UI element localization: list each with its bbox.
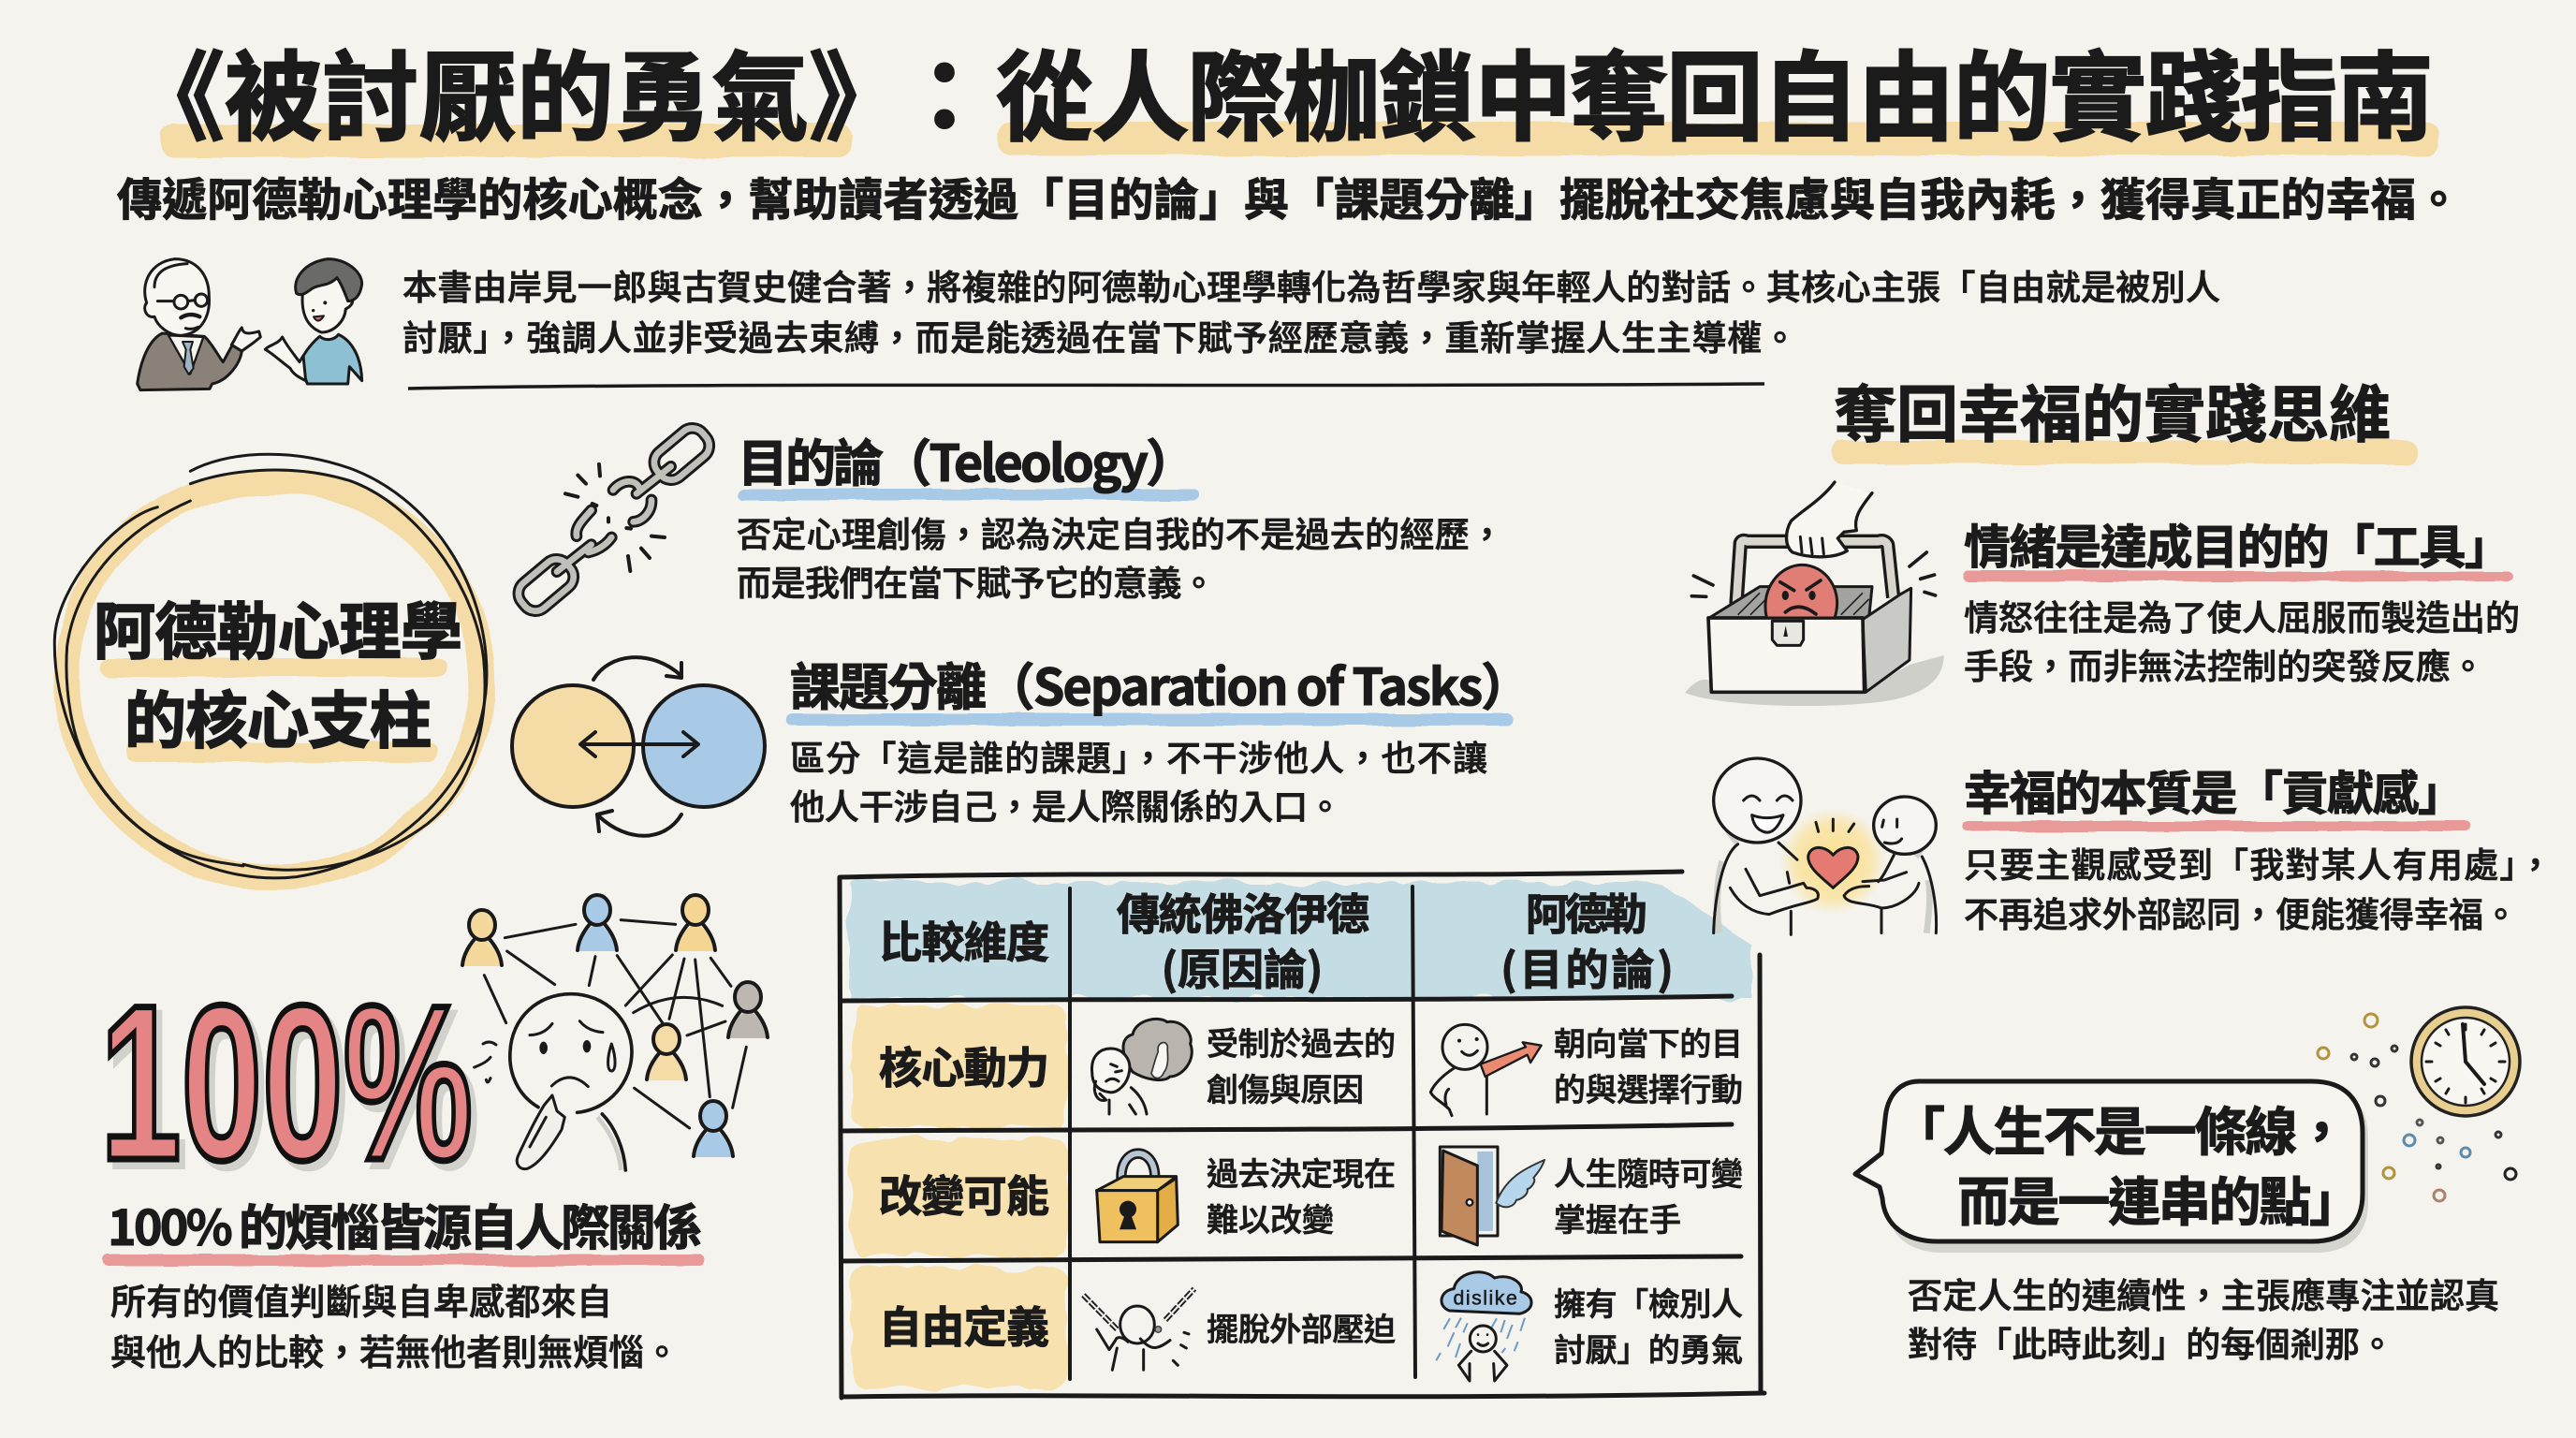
alert ticks [1691, 552, 1936, 596]
yellow ring [66, 480, 482, 877]
contribution heading: 幸福的本質是「貢獻感」 [1964, 756, 2465, 824]
stat: 100 percent [100, 960, 478, 1213]
dislike label: dislike [1453, 1286, 1517, 1309]
clock [2411, 1007, 2520, 1116]
handle [1736, 540, 1894, 604]
top arrow [593, 657, 681, 680]
cell line 2: 的與選擇行動 [1554, 1064, 1743, 1110]
teleology description line 1: 否定心理創傷，認為決定自我的不是過去的經歷， [737, 506, 1504, 557]
network person blue [578, 895, 617, 951]
network person yellow [647, 1024, 686, 1080]
network person yellow [676, 895, 715, 951]
title colon: ： [896, 19, 993, 160]
icon: padlock [1097, 1153, 1178, 1242]
network person yellow [462, 910, 502, 966]
quote explanation [1908, 1268, 2499, 1367]
floor shadow [1685, 655, 1944, 706]
callout: speech bubble quote [1855, 1081, 2368, 1253]
icon: person breaking chains [1083, 1289, 1194, 1370]
latch [1772, 621, 1804, 645]
row label wash: core motivation [852, 1005, 1067, 1127]
title highlight left [161, 124, 852, 157]
network person blue [694, 1101, 733, 1157]
separation description line 2: 他人干涉自己，是人際關係的入口。 [790, 779, 1342, 829]
contribution underline [1963, 821, 2471, 831]
explanation line 2: 對待「此時此刻」的每個剎那。 [1908, 1316, 2394, 1367]
title text left: 《被討厭的勇氣》 [127, 19, 906, 160]
cell line 1: 受制於過去的 [1207, 1019, 1396, 1064]
icon: person with trauma cloud [1091, 1019, 1192, 1114]
small person [1916, 812, 1929, 933]
teleology heading: 目的論（Teleology） [738, 422, 1196, 496]
row label: possibility of change: 改變可能 [879, 1163, 1049, 1225]
icon: door with wing [1440, 1147, 1544, 1245]
header: Adler: 阿德勒 [1526, 881, 1647, 943]
bottom arrow [597, 811, 681, 836]
big person [1717, 786, 1738, 933]
cell line 1: 朝向當下的目 [1554, 1019, 1743, 1064]
scattered dots [2318, 1014, 2516, 1201]
block: interpersonal worries [103, 1189, 705, 1375]
heading text: 奪回幸福的實踐思維 [1835, 365, 2391, 455]
icon: person pointing forward [1430, 1024, 1542, 1116]
icon: two people and heart [1714, 758, 1937, 934]
title highlight right [998, 122, 2439, 155]
heading: practice mindset [1832, 365, 2417, 464]
contribution line 2: 不再追求外部認同，便能獲得幸福。 [1964, 887, 2518, 937]
cell line 1: 擁有「檢別人 [1554, 1279, 1743, 1325]
heading highlight [1832, 440, 2417, 464]
teleology underline [737, 489, 1199, 500]
emotion heading: 情緒是達成目的的「工具」 [1964, 510, 2511, 578]
explanation line 1: 否定人生的連續性，主張應專注並認真 [1908, 1268, 2499, 1318]
clock and dots [2318, 1007, 2520, 1201]
blue circle [643, 685, 765, 807]
stat number: 100% [100, 960, 473, 1207]
subtitle: 傳遞阿德勒心理學的核心概念，幫助讀者透過「目的論」與「課題分離」擺脫社交焦慮與自我內耗，獲得真正的幸福。 [117, 163, 2461, 228]
intro line 2: 討厭」，強調人並非受過去束縛，而是能透過在當下賦予經歷意義，重新掌握人生主導權。 [402, 310, 1797, 360]
angry face [1765, 565, 1837, 618]
concept: separation of tasks [786, 646, 1531, 829]
separation heading: 課題分離（Separation of Tasks） [790, 646, 1531, 720]
row label wash: definition of freedom [852, 1268, 1067, 1387]
box front [1708, 618, 1865, 692]
row label wash: possibility of change [852, 1138, 1067, 1256]
text: life can change [1554, 1149, 1743, 1240]
text: past trauma [1207, 1019, 1396, 1110]
worries line 1: 所有的價值判斷與自卑感都來自 [110, 1273, 612, 1325]
network lines [484, 920, 746, 1128]
icon: philosopher and youth [138, 259, 362, 390]
old philosopher [138, 259, 260, 390]
heart [1808, 847, 1858, 888]
insight: emotion as tool [1963, 510, 2520, 689]
text: courage to be disliked [1554, 1279, 1743, 1371]
cell line 2: 掌握在手 [1554, 1195, 1681, 1240]
worried head and body [475, 994, 632, 1170]
yellow circle [512, 685, 634, 807]
insight: contribution [1963, 756, 2553, 937]
pillar line 1 highlight [100, 658, 447, 677]
glow [1780, 808, 1886, 915]
title [127, 19, 2439, 160]
double arrow [580, 732, 698, 756]
stat shadow: 100% [106, 966, 478, 1213]
worries heading: 100% 的煩惱皆源自人際關係 [108, 1189, 702, 1259]
ink ring [54, 454, 487, 878]
panel: core pillars circle [54, 454, 487, 878]
separation description line 1: 區分「這是誰的課題」，不干涉他人，也不讓 [790, 730, 1487, 781]
bubble [1855, 1081, 2363, 1241]
header wash [850, 882, 1752, 998]
header: Freud subtitle: (原因論) [1162, 936, 1323, 998]
bubble shadow [1865, 1086, 2368, 1253]
row label: core motivation: 核心動力 [879, 1034, 1049, 1096]
title text right: 從人際枷鎖中奪回自由的實踐指南 [996, 19, 2434, 160]
worries line 2: 與他人的比較，若無他者則無煩惱。 [110, 1324, 680, 1375]
table grid [840, 872, 1764, 1398]
concept: teleology [737, 422, 1504, 606]
separation underline [786, 713, 1513, 726]
cell line 2: 討厭」的勇氣 [1554, 1325, 1743, 1371]
emotion line 2: 手段，而非無法控制的突發反應。 [1964, 638, 2485, 689]
header: comparison dimension: 比較維度 [879, 909, 1049, 971]
emotion line 1: 情怒往往是為了使人屈服而製造出的 [1964, 590, 2520, 640]
youth [265, 259, 362, 384]
cell line 1: 過去決定現在 [1207, 1149, 1396, 1195]
header: Freud: 傳統佛洛伊德 [1117, 881, 1369, 943]
box interior [1709, 587, 1872, 618]
cell line 2: 難以改變 [1207, 1195, 1334, 1240]
text: present goal [1554, 1019, 1743, 1110]
comparison table [840, 872, 1764, 1398]
icon: two overlapping task circles [512, 657, 765, 836]
quote line 2: 而是一連串的點」 [1957, 1161, 2362, 1237]
pillar line 2 highlight [126, 742, 438, 762]
emotion underline [1963, 571, 2512, 581]
text: past decides [1207, 1149, 1396, 1240]
row label: definition of freedom: 自由定義 [879, 1294, 1049, 1356]
pillar line 2: 的核心支柱 [124, 671, 432, 761]
box side [1863, 588, 1911, 692]
icon: worried person in a social network [462, 895, 768, 1170]
hand [1787, 482, 1872, 557]
pillar line 1: 阿德勒心理學 [94, 582, 462, 672]
text: escape pressure: 擺脫外部壓迫 [1207, 1304, 1396, 1350]
icon: broken chain [513, 422, 715, 617]
icon: toolbox with angry face [1685, 482, 1944, 706]
intro line 1: 本書由岸見一郎與古賀史健合著，將複雜的阿德勒心理學轉化為哲學家與年輕人的對話。其核心主張「自由就是被別人 [402, 259, 2220, 310]
icon: dislike cloud and person [1436, 1272, 1531, 1381]
worries underline [103, 1255, 705, 1266]
contribution line 1: 只要主觀感受到「我對某人有用處」， [1964, 837, 2553, 888]
intro text [402, 259, 2220, 360]
header: Adler subtitle: (目的論) [1500, 936, 1676, 998]
teleology description line 2: 而是我們在當下賦予它的意義。 [737, 555, 1216, 606]
cell line 1: 人生隨時可變 [1554, 1149, 1743, 1195]
cell line 2: 創傷與原因 [1207, 1064, 1364, 1110]
quote line 1: 「人生不是一條線， [1893, 1091, 2348, 1167]
network person grey [728, 982, 768, 1038]
